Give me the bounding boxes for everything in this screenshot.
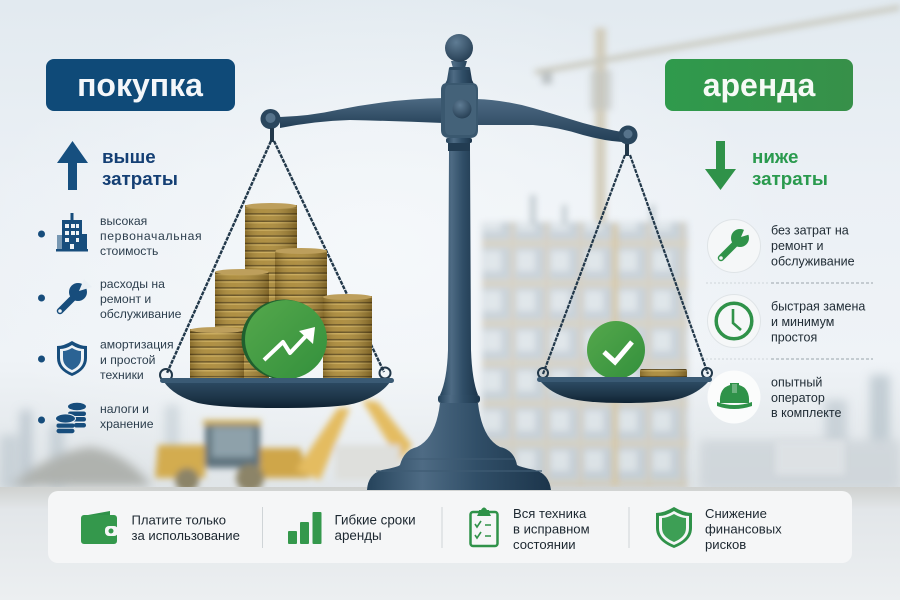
arrow up [57,141,88,190]
text: ремонт и [100,292,151,306]
scale stand [367,34,551,490]
finial [445,61,474,84]
text: расходы на [100,277,165,291]
item: quick replacement [708,294,865,348]
text: Гибкие сроки [334,512,416,528]
higher costs label: выше [102,146,156,167]
heading: rental: аренда [703,67,815,103]
text: рисков [705,537,746,552]
icon: wrench [58,279,92,313]
item: no repair costs [708,220,855,272]
text: опытный [771,376,822,390]
text: амортизация [100,338,174,352]
coin stack 2 [215,269,269,378]
left hub [260,109,280,129]
higher costs label: затраты [102,168,178,189]
text: хранение [100,417,154,431]
item: repair costs [38,277,182,321]
coin stack 1 [190,327,244,378]
text: обслуживание [100,307,182,321]
text: быстрая замена [771,300,865,314]
panel: purchase [38,59,235,433]
small coin on right pan [640,369,687,378]
item: high initial cost [38,213,202,258]
text: Снижение [705,506,767,521]
text: первоначальная [100,229,202,243]
icon: wrench in circle [708,220,760,272]
text: аренды [334,528,382,543]
lower costs label: ниже [752,146,798,167]
icon: helmet in circle [708,370,760,424]
benefit: pay for use [81,511,240,544]
icon: clock in circle [708,294,760,348]
text: оператор [771,391,825,405]
text: простоя [771,330,817,344]
coin stack 5 [323,294,372,378]
icon: shield [57,341,87,376]
lower costs label: затраты [752,168,828,189]
panel: rental benefits [48,491,852,563]
right pan [537,377,712,403]
text: Платите только [132,512,226,528]
arrow down [705,141,736,190]
stand base [367,403,551,490]
benefit: equipment in working order [470,506,590,552]
text: в исправном [513,522,590,536]
text: за использование [132,528,240,543]
text: обслуживание [771,254,855,268]
left chains [160,128,390,381]
heading: rental [665,59,853,111]
text: высокая [100,214,147,228]
item: operator included [708,370,841,424]
text: состоянии [513,537,576,552]
item: taxes and storage [38,402,154,433]
heading: purchase: покупка [77,67,203,103]
text: и минимум [771,315,834,329]
icon: bar chart [288,512,322,544]
text: и простой [100,353,155,367]
right hub [618,126,638,144]
heading: purchase [46,59,235,111]
green growth badge [242,300,327,380]
text: стоимость [100,244,158,258]
text: техники [100,368,144,382]
icon: building [56,213,88,252]
left pan [160,378,394,408]
green check badge [587,321,645,379]
item: depreciation [38,338,174,382]
icon: wallet [81,511,118,544]
balance beam [260,83,638,144]
icon: checklist [470,508,498,546]
text: в комплекте [771,406,841,420]
coin stack 3 [245,203,297,305]
icon: coin stacks [56,403,86,433]
pivot plate [441,83,478,138]
text: без затрат на [771,224,849,238]
panel: rental [665,59,873,424]
coin stacks on left pan [190,203,372,378]
column [440,150,478,395]
coin stack 4 [275,248,327,340]
right chains [538,144,712,378]
benefit: flexible terms [288,512,416,544]
text: налоги и [100,402,149,416]
text: Вся техника [513,506,587,521]
benefit: lower financial risk [656,506,782,552]
text: ремонт и [771,239,824,253]
text: финансовых [705,522,782,536]
icon: green shield [656,507,692,548]
